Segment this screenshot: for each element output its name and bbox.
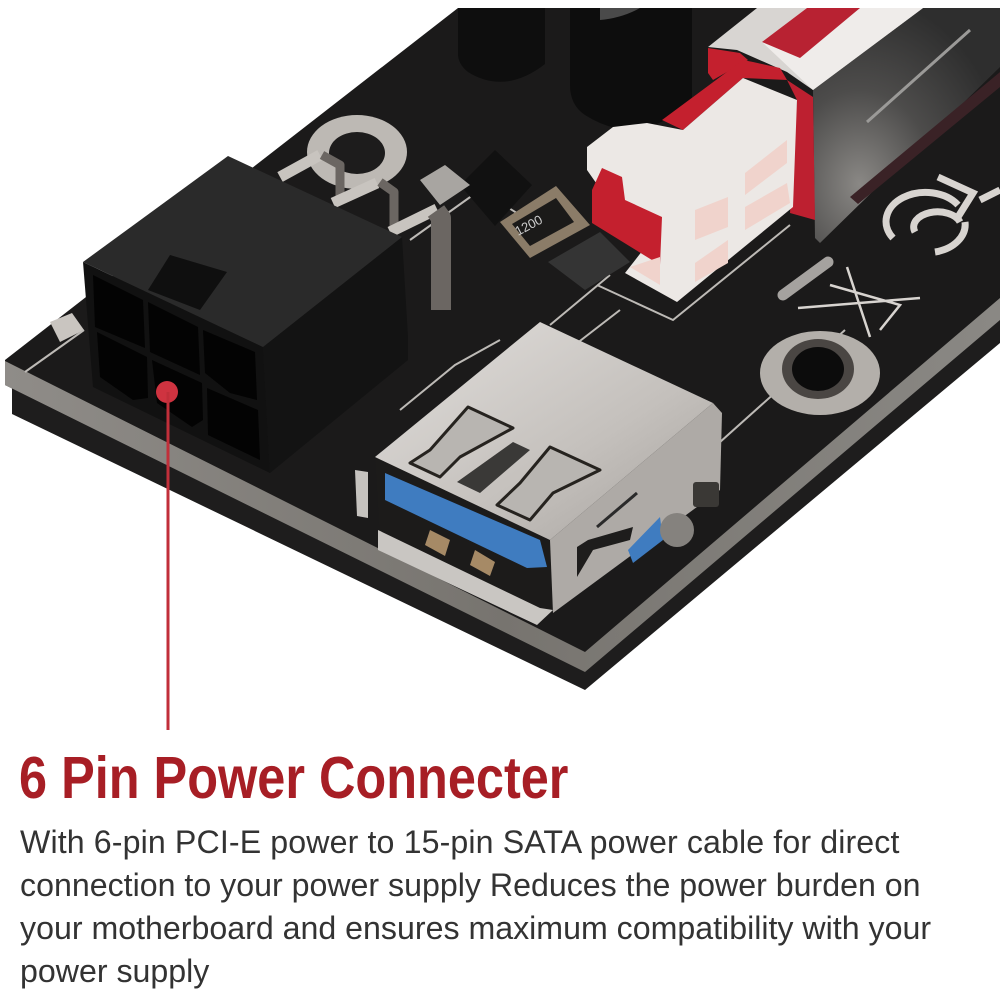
6-pin power connector (83, 156, 408, 473)
description text: your motherboard and ensures maximum compatibility with your (20, 910, 931, 946)
small components: 1200 (512, 212, 545, 239)
foam pad under board (12, 310, 1000, 690)
product photo: riser board with 6-pin connector (5, 8, 1000, 730)
PCIe slot (708, 8, 1000, 243)
USB 3.0 port (355, 322, 722, 625)
small components (420, 150, 630, 290)
title: 6 Pin Power Connecter (19, 745, 568, 811)
description text: connection to your power supply Reduces the power burden on (20, 867, 921, 903)
description text: power supply (20, 953, 209, 989)
connector pins (280, 155, 441, 310)
red and white clip (587, 60, 815, 302)
callout line (156, 381, 178, 730)
FC mark and recycling icon (783, 177, 1000, 337)
description text (20, 824, 931, 989)
circuit board (5, 8, 1000, 672)
mounting hole: top (307, 115, 407, 189)
capacitors (458, 8, 692, 129)
mounting hole: right (760, 331, 880, 415)
description text: With 6-pin PCI-E power to 15-pin SATA power cable for direct (20, 824, 900, 860)
